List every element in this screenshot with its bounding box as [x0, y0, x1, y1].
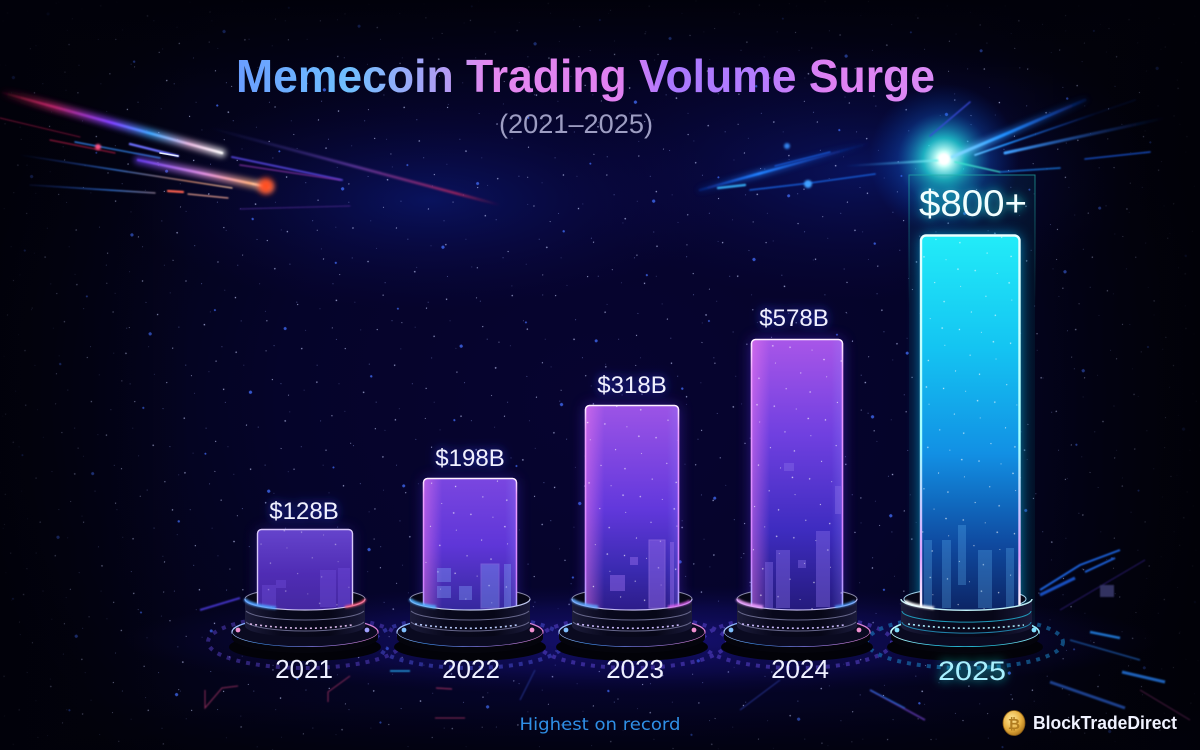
- subtitle: (2021–2025): [499, 109, 653, 139]
- column 2025: [887, 175, 1043, 661]
- icon: bitcoin coin: [1003, 710, 1025, 736]
- brand name: BlockTradeDirect: [1033, 713, 1177, 733]
- value label: 2024: $578B: [759, 305, 829, 332]
- value label: 2021: $128B: [269, 498, 339, 525]
- title: Memecoin Trading Volume Surge: [236, 50, 935, 102]
- column 2024: [721, 339, 873, 661]
- column 2023: [556, 405, 708, 661]
- year label: 2024: 2024: [771, 654, 829, 684]
- value label: 2025: $800+: [919, 183, 1027, 224]
- left light streaks: [0, 92, 500, 209]
- floor: circuit traces and dashed rings: [200, 550, 1190, 720]
- year label: 2025: 2025: [938, 656, 1006, 686]
- note: highest on record: Highest on record: [520, 715, 680, 734]
- value label: 2022: $198B: [435, 445, 505, 472]
- right light streaks and flare: [700, 84, 1165, 234]
- icon: bitcoin coin: ₿: [1008, 716, 1020, 733]
- column 2022: [394, 478, 546, 661]
- brand logo: [1003, 710, 1177, 736]
- column 2021: [229, 529, 381, 661]
- year label: 2022: 2022: [442, 654, 500, 684]
- year label: 2021: 2021: [275, 654, 333, 684]
- bar chart: [229, 175, 1043, 661]
- year label: 2023: 2023: [606, 654, 664, 684]
- value label: 2023: $318B: [597, 372, 667, 399]
